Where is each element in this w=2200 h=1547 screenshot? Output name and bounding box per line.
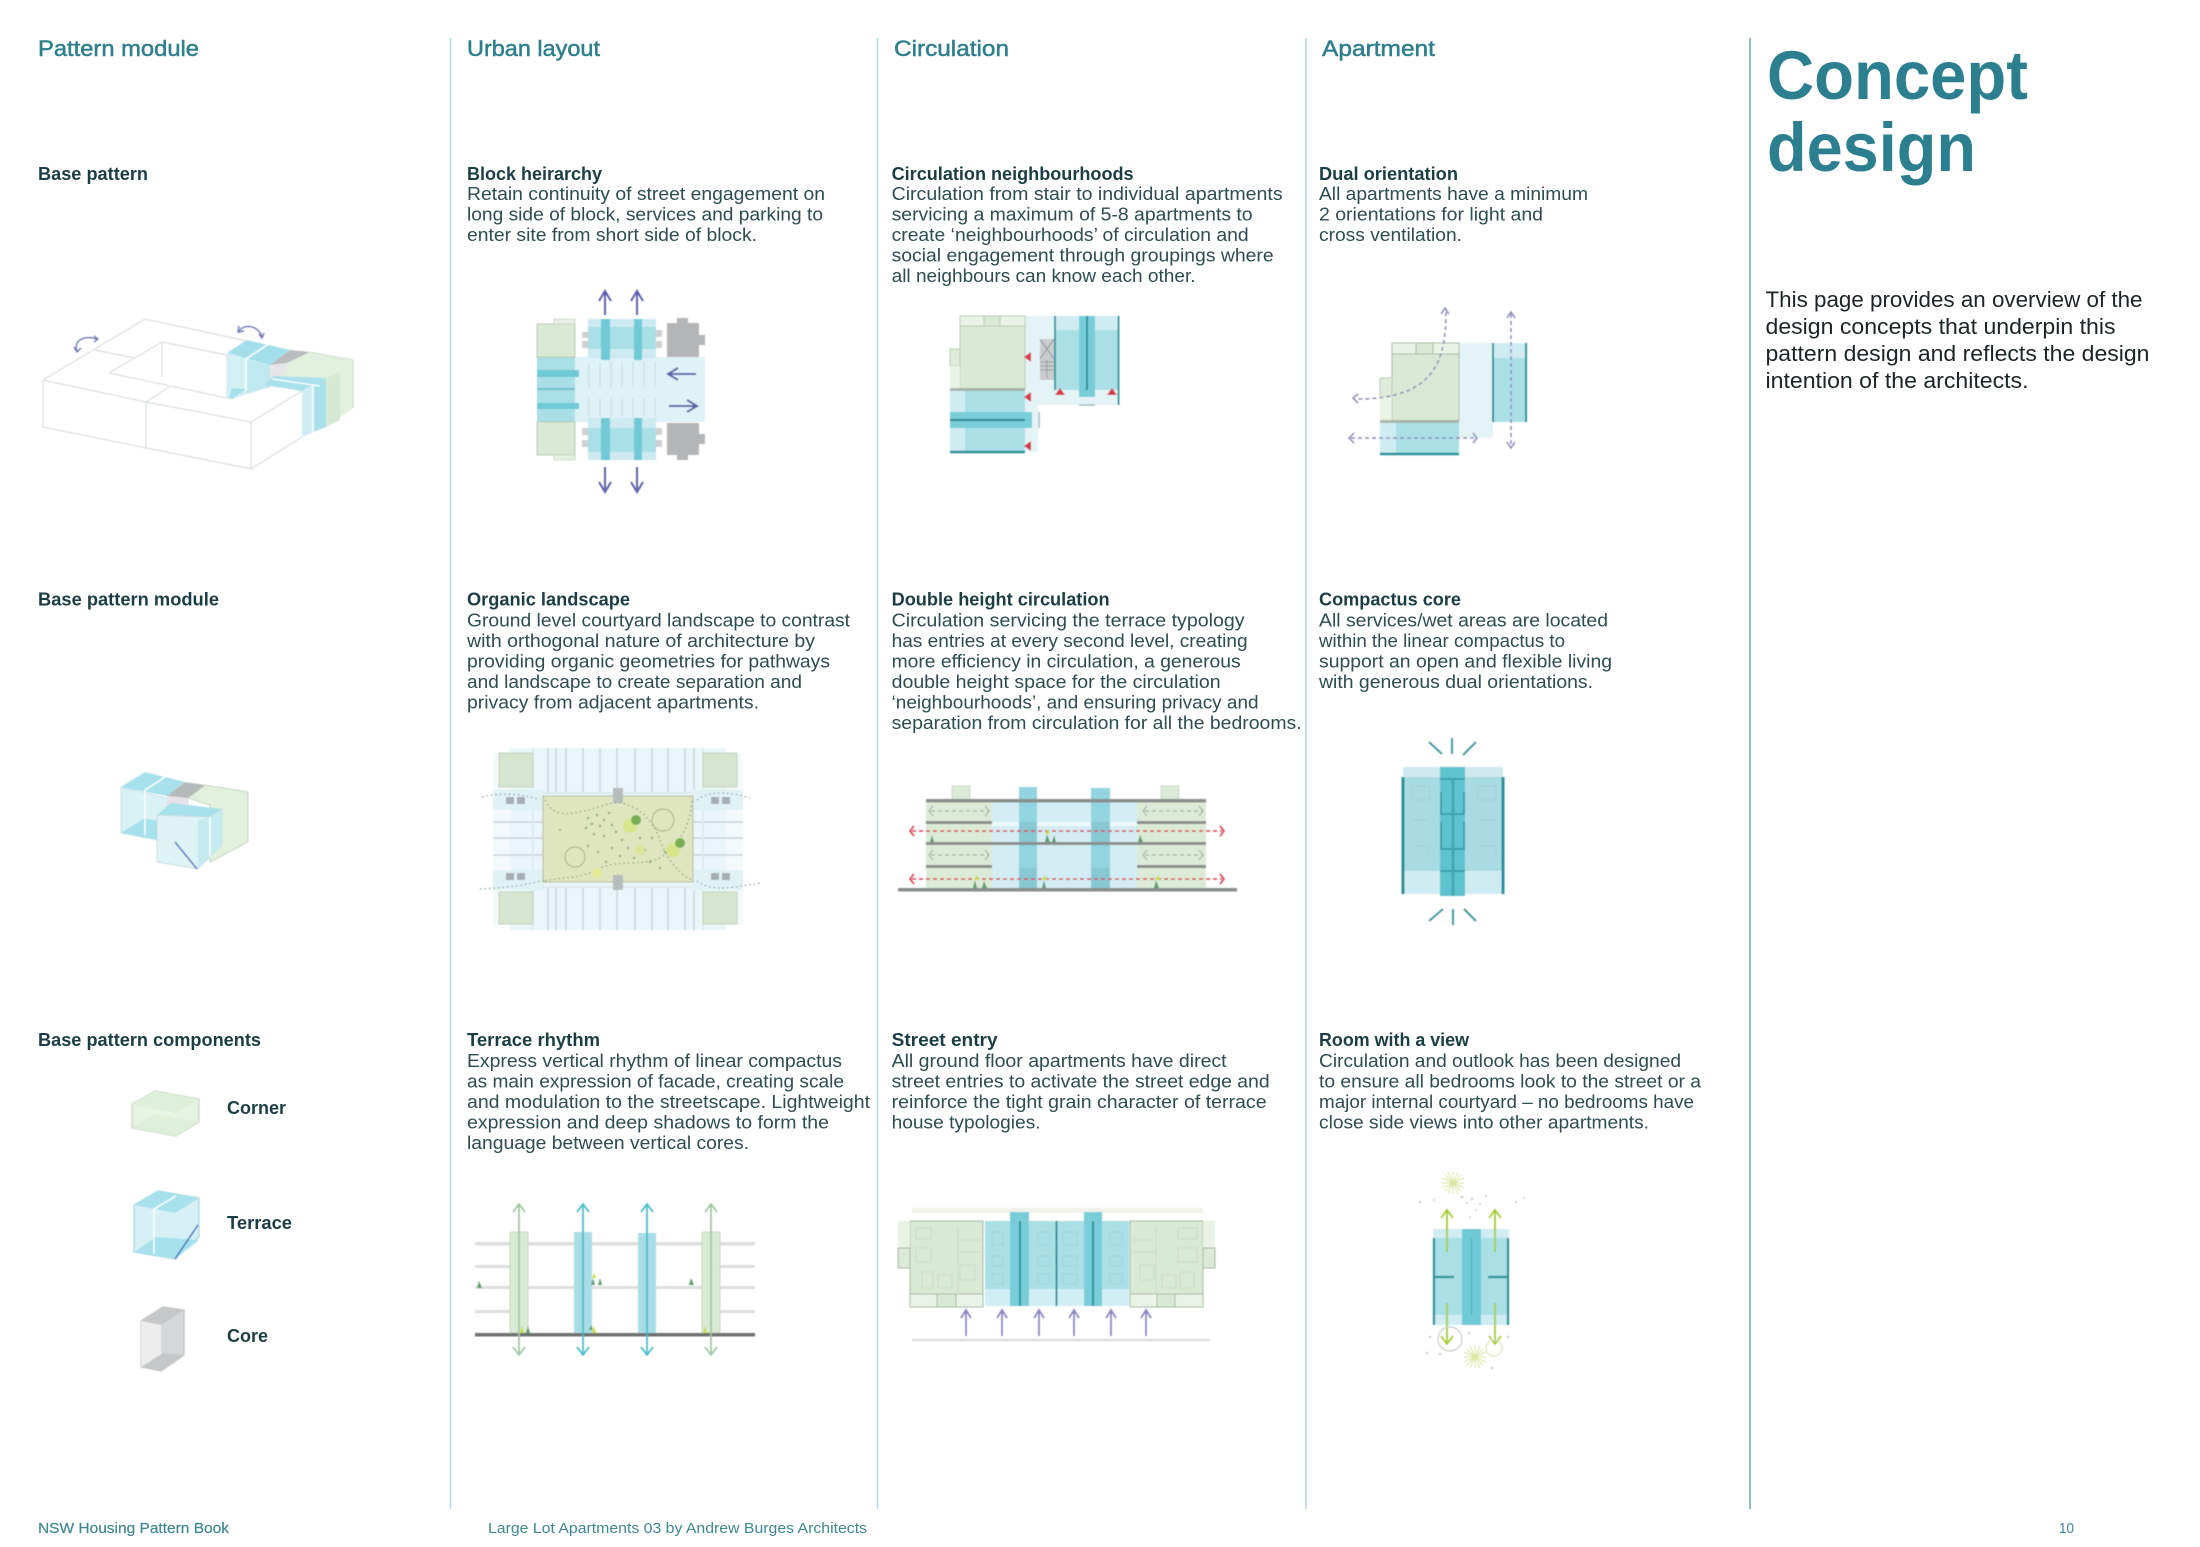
- text block: Street entry: [892, 1030, 1270, 1132]
- entry arrows: [961, 1310, 1151, 1336]
- text block: Block heirarchy: long side of block, services and parking to: [467, 204, 823, 224]
- text block: Organic landscape: Organic landscape: [467, 590, 630, 610]
- text block: Circulation neighbourhoods: servicing a maximum of 5-8 apartments to: [892, 204, 1253, 224]
- text block: Compactus core: within the linear compactus to: [1318, 631, 1565, 651]
- right cyan: [1493, 343, 1526, 358]
- green apartment: [1392, 343, 1459, 354]
- text block: Double height circulation: double height space for the circulation: [892, 672, 1221, 692]
- text block: Room with a view: major internal courtyard – no bedrooms have: [1319, 1092, 1694, 1112]
- diagram: base pattern isometric: [43, 319, 353, 469]
- text block: Compactus core: [1318, 590, 1612, 692]
- title: Concept: [1767, 37, 2028, 114]
- legend: corner: Corner: [227, 1098, 286, 1118]
- legend: terrace: [134, 1191, 292, 1259]
- text block: Double height circulation: more efficiency in circulation, a generous: [892, 652, 1241, 672]
- text block: Compactus core: Compactus core: [1319, 590, 1461, 610]
- legend: core: [141, 1307, 268, 1371]
- right green corner: [1130, 1221, 1203, 1294]
- light circulation zone: [1025, 316, 1119, 452]
- left green corner: [910, 1221, 983, 1294]
- column heading: Pattern module: Pattern module: [38, 36, 199, 61]
- text block: Block heirarchy: [467, 164, 825, 245]
- legend: terrace: Terrace: [227, 1213, 292, 1233]
- text block: Circulation neighbourhoods: create ‘neighbourhoods’ of circulation and: [892, 225, 1249, 245]
- vertical cores: [510, 1232, 528, 1333]
- text block: Street entry: reinforce the tight grain character of terrace: [892, 1092, 1267, 1112]
- text block: Double height circulation: [892, 590, 1302, 733]
- legend: core: Core: [227, 1326, 268, 1346]
- central core: [1440, 767, 1465, 896]
- text block: Street entry: street entries to activate the street edge and: [892, 1072, 1270, 1092]
- diagram: terrace rhythm elevation: [475, 1204, 755, 1355]
- intro paragraph: pattern design and reflects the design: [1766, 341, 2150, 366]
- text block: Block heirarchy: enter site from short side of block.: [467, 225, 757, 245]
- text block: Organic landscape: [466, 590, 850, 712]
- text block: Double height circulation: has entries at every second level, creating: [892, 631, 1248, 651]
- lift and stair: [1040, 339, 1054, 380]
- text block: Compactus core: All services/wet areas are located: [1319, 610, 1608, 630]
- text block: Organic landscape: privacy from adjacent apartments.: [467, 692, 759, 712]
- ground line: [475, 1333, 755, 1336]
- white block outline: [43, 319, 302, 469]
- green corner volume: [272, 352, 353, 427]
- courtyard: [543, 796, 693, 882]
- diagram: block hierarchy plan: [537, 291, 705, 492]
- green corner blocks: [537, 324, 575, 455]
- lower cyan apartments: [950, 391, 965, 452]
- grey core blocks: [667, 318, 705, 460]
- text block: Block heirarchy: Retain continuity of street engagement on: [467, 184, 825, 204]
- faint room lines: [1412, 786, 1496, 856]
- text block: Circulation neighbourhoods: social engagement through groupings where: [892, 246, 1274, 266]
- diagram: base pattern module isometric: [121, 772, 248, 869]
- text block: Dual orientation: cross ventilation.: [1319, 225, 1462, 245]
- roof boxes: [952, 786, 970, 799]
- diagram: street entry plan: [898, 1208, 1215, 1341]
- title: [1767, 37, 2028, 186]
- text block: Compactus core: with generous dual orientations.: [1318, 672, 1593, 692]
- text block: Room with a view: close side views into other apartments.: [1319, 1112, 1649, 1132]
- text block: Block heirarchy: Block heirarchy: [467, 164, 602, 184]
- centre street zone: [575, 357, 705, 422]
- trees and courtyard planting: [1442, 1172, 1486, 1368]
- green view arrows: [1441, 1210, 1501, 1344]
- grey dashed spans: [929, 806, 1203, 860]
- text block: Circulation neighbourhoods: [892, 164, 1283, 286]
- core markers: [506, 797, 730, 880]
- text block: Room with a view: [1319, 1030, 1702, 1132]
- diagram: organic landscape plan: [480, 748, 760, 930]
- intro paragraph: intention of the architects.: [1766, 368, 2028, 393]
- vertical cores: [1019, 787, 1037, 888]
- light zone: [1459, 343, 1493, 438]
- text block: Terrace rhythm: expression and deep shadows to form the: [467, 1112, 829, 1132]
- blue diagonal line: [175, 842, 197, 869]
- top and bottom cyan terraces: [582, 319, 662, 460]
- heading: Base pattern components: Base pattern components: [38, 1030, 261, 1050]
- planting: [477, 1278, 694, 1333]
- text block: Organic landscape: with orthogonal nature of architecture by: [466, 631, 816, 651]
- text block: Organic landscape: Ground level courtyard landscape to contrast: [467, 610, 850, 630]
- text block: Terrace rhythm: Terrace rhythm: [467, 1030, 600, 1050]
- red entry markers: [1024, 352, 1117, 451]
- text block: Double height circulation: Double height circulation: [892, 590, 1110, 610]
- text block: Street entry: All ground floor apartments have direct: [892, 1051, 1227, 1071]
- facade and party walls: [1434, 1238, 1508, 1325]
- intro paragraph: [1766, 287, 2150, 393]
- cyan terrace volume: [227, 353, 270, 399]
- legend: corner: [132, 1091, 286, 1136]
- room outlines: [916, 1226, 1197, 1294]
- text block: Terrace rhythm: language between vertical cores.: [467, 1133, 749, 1153]
- trees and planting: [559, 812, 666, 869]
- text block: Dual orientation: All apartments have a minimum: [1319, 184, 1588, 204]
- text block: Room with a view: Circulation and outlook has been designed: [1319, 1051, 1681, 1071]
- footer: project credit: Large Lot Apartments 03 by Andrew Burges Architects: [488, 1520, 867, 1537]
- grey core volume: [270, 350, 310, 365]
- intro paragraph: This page provides an overview of the: [1766, 287, 2142, 312]
- title: design: [1767, 109, 1976, 186]
- footer: publication name: NSW Housing Pattern Book: [38, 1520, 230, 1537]
- vertical arrows: [513, 1204, 717, 1355]
- text block: Circulation neighbourhoods: all neighbours can know each other.: [892, 266, 1196, 286]
- green corner blocks: [499, 753, 737, 924]
- planting: [930, 829, 1160, 888]
- diagram: double height circulation section: [898, 786, 1237, 892]
- column heading: Urban layout: Urban layout: [467, 36, 601, 61]
- text block: Street entry: Street entry: [892, 1030, 998, 1050]
- facade lines: [1403, 777, 1503, 894]
- heading: Base pattern module: Base pattern module: [38, 590, 219, 610]
- light rays: [1429, 738, 1476, 925]
- text block: Double height circulation: Circulation servicing the terrace typology: [892, 610, 1246, 630]
- green apartment: [960, 316, 1025, 326]
- lower cyan: [1380, 423, 1396, 453]
- red dashed circulation arrows: [910, 826, 1224, 884]
- vertical arrows: [599, 291, 643, 492]
- diagram: compactus core plan: [1403, 738, 1503, 925]
- text block: Terrace rhythm: and modulation to the streetscape. Lightweight: [467, 1092, 870, 1112]
- text block: Terrace rhythm: [467, 1030, 870, 1153]
- text block: Organic landscape: and landscape to create separation and: [467, 672, 802, 692]
- heading: Base pattern: Base pattern: [38, 164, 148, 184]
- text block: Circulation neighbourhoods: Circulation neighbourhoods: [892, 164, 1134, 184]
- text block: Compactus core: support an open and flexible living: [1319, 652, 1612, 672]
- footer: page number: 10: [2059, 1520, 2074, 1537]
- pathways: [480, 793, 760, 889]
- text block: Dual orientation: Dual orientation: [1319, 164, 1458, 184]
- column heading: Apartment: Apartment: [1322, 36, 1436, 61]
- front cyan volume: [264, 376, 326, 391]
- cores: [1010, 1212, 1029, 1306]
- slabs: [898, 799, 1237, 892]
- text block: Organic landscape: providing organic geometries for pathways: [467, 652, 830, 672]
- diagram: dual orientation plan: [1349, 308, 1526, 454]
- column heading: Circulation: Circulation: [894, 36, 1009, 61]
- apartment grid lines: [493, 748, 743, 930]
- text block: Circulation neighbourhoods: Circulation from stair to individual apartments: [892, 184, 1283, 204]
- diagram: circulation neighbourhoods plan: [950, 316, 1119, 452]
- text block: Street entry: house typologies.: [892, 1112, 1041, 1132]
- text block: Room with a view: Room with a view: [1319, 1030, 1470, 1050]
- cyan terraces: [985, 1221, 1129, 1289]
- upper cyan apartments: [1055, 316, 1119, 330]
- left cyan block: [537, 357, 575, 422]
- rotation arrows: [74, 336, 98, 352]
- text block: Terrace rhythm: as main expression of facade, creating scale: [467, 1072, 844, 1092]
- text block: Terrace rhythm: Express vertical rhythm of linear compactus: [467, 1051, 842, 1071]
- text block: Room with a view: to ensure all bedrooms look to the street or a: [1319, 1072, 1702, 1092]
- text block: Double height circulation: ‘neighbourhoods’, and ensuring privacy and: [892, 692, 1259, 712]
- text block: Dual orientation: [1319, 164, 1588, 245]
- horizontal arrows: [668, 368, 697, 412]
- floor lines: [475, 1242, 755, 1313]
- text block: Double height circulation: separation from circulation for all the bedrooms.: [892, 713, 1302, 733]
- diagram: room with a view plan: [1419, 1172, 1525, 1369]
- dashed orientation arrows: [1349, 308, 1515, 448]
- intro paragraph: design concepts that underpin this: [1766, 314, 2116, 339]
- text block: Dual orientation: 2 orientations for light and: [1319, 204, 1543, 224]
